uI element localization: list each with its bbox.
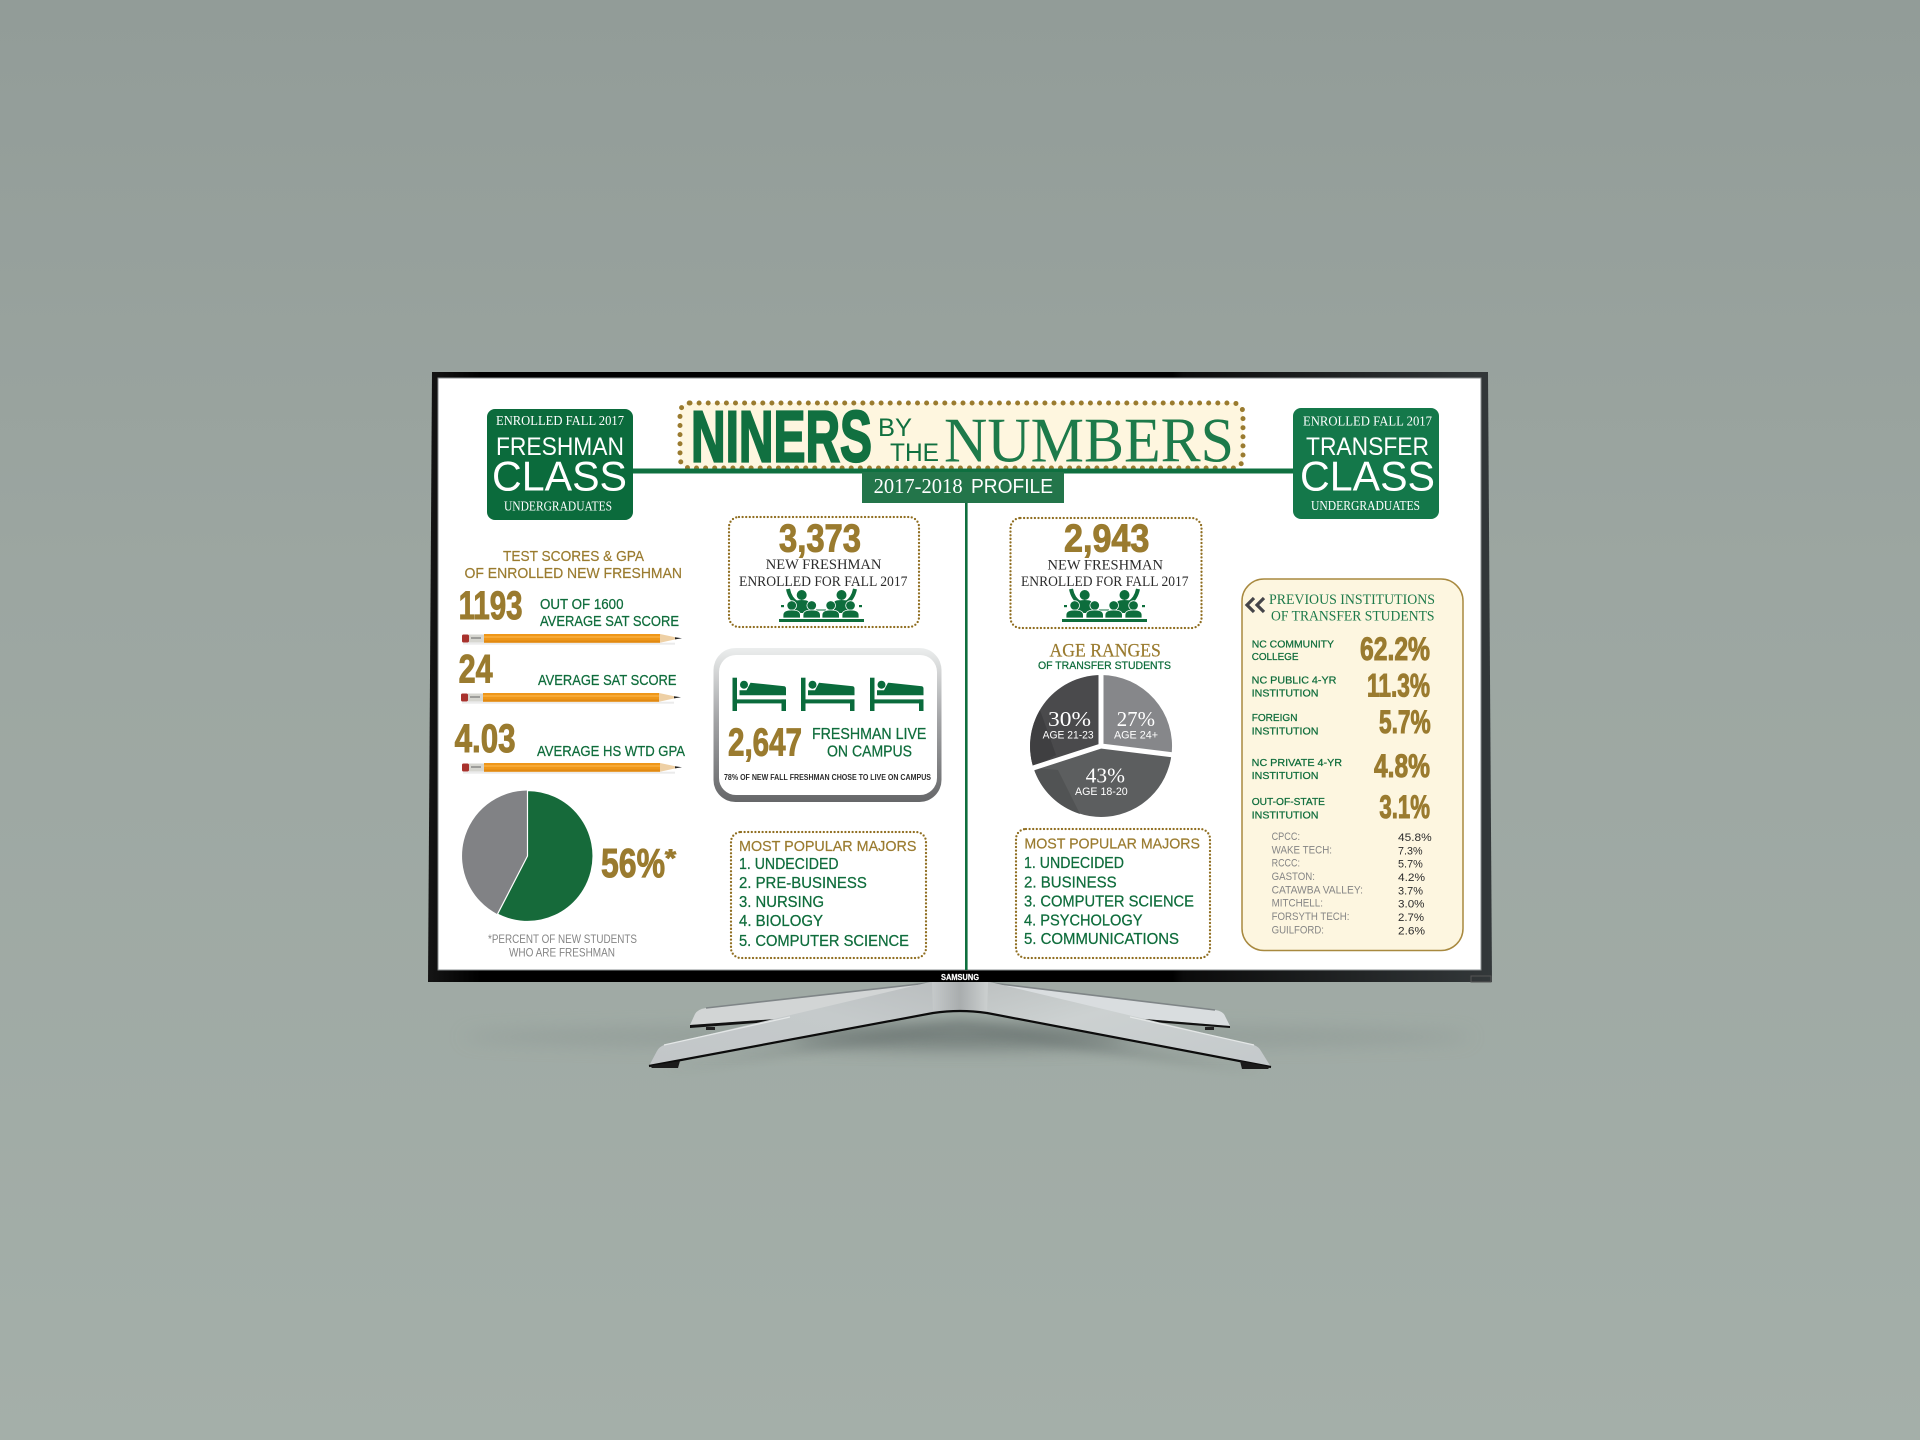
list: community colleges: 3.7% <box>1398 885 1423 897</box>
panel: freshman live on campus: 78% OF NEW FALL FRESHMAN CHOSE TO LIVE ON CAMPUS <box>724 773 932 782</box>
row: nc private: 4.8% <box>1374 748 1430 784</box>
heading: previous institutions <box>1269 592 1435 625</box>
panel: freshman class badge <box>487 409 633 520</box>
floor shadow <box>462 1020 1472 1072</box>
heading: age ranges <box>1038 642 1171 672</box>
list: community colleges: 4.2% <box>1398 872 1425 884</box>
list: community colleges: GASTON: <box>1272 871 1315 883</box>
stat: sat score 1193: OUT OF 1600 <box>540 597 624 613</box>
icon: bed <box>870 678 924 711</box>
footnote: WHO ARE FRESHMAN <box>509 946 615 960</box>
panel: freshman live on campus: FRESHMAN LIVE <box>812 726 926 743</box>
pie chart: age ranges <box>1030 672 1174 817</box>
panel: freshman class badge: UNDERGRADUATES <box>504 500 612 514</box>
title: numbers: NUMBERS <box>944 406 1234 476</box>
slice: 27 percent: AGE 24+ <box>1114 730 1158 742</box>
stat: 56 percent: * <box>665 845 677 872</box>
row: nc public: NC PUBLIC 4-YR <box>1252 675 1337 687</box>
panel: freshman majors <box>731 832 926 958</box>
slice: 43 percent: AGE 18-20 <box>1075 786 1128 798</box>
list: community colleges: WAKE TECH: <box>1272 844 1332 856</box>
icon: crowd <box>1062 589 1147 622</box>
stat: sat score 1193: AVERAGE SAT SCORE <box>540 614 679 630</box>
list: community colleges: 5.7% <box>1398 859 1423 871</box>
panel: transfer majors: 1. UNDECIDED <box>1024 855 1124 872</box>
stat: gpa 4.03: 4.03 <box>455 717 516 761</box>
panel: transfer majors: 3. COMPUTER SCIENCE <box>1024 894 1194 911</box>
slice: 27 percent: 27% <box>1117 707 1155 731</box>
panel: new freshman count: 3,373 <box>779 518 861 560</box>
list: community colleges: 7.3% <box>1398 845 1423 857</box>
panel: transfer majors <box>1016 829 1210 958</box>
title: the: THE <box>890 439 939 467</box>
icon: pencil <box>461 693 681 704</box>
panel: transfer majors: 2. BUSINESS <box>1024 875 1117 892</box>
title: niners: NINERS <box>691 398 872 478</box>
row: foreign: FOREIGN <box>1252 712 1298 724</box>
row: nc community college: COLLEGE <box>1252 651 1298 663</box>
stat: score 24: 24 <box>459 648 493 692</box>
row: nc public <box>1252 668 1430 704</box>
panel: transfer majors: 4. PSYCHOLOGY <box>1024 912 1142 929</box>
icon: pencil <box>462 634 682 645</box>
stat: 56 percent: 56% <box>601 840 665 886</box>
panel: title banner <box>680 398 1243 478</box>
tv stand <box>649 982 1271 1069</box>
panel: transfer class badge: ENROLLED FALL 2017 <box>1303 414 1432 430</box>
row: nc private: NC PRIVATE 4-YR <box>1252 757 1342 769</box>
title: by: BY <box>878 414 912 442</box>
panel: freshman majors: 5. COMPUTER SCIENCE <box>739 933 909 950</box>
icon: pencil <box>462 763 682 774</box>
panel: freshman majors: MOST POPULAR MAJORS <box>739 838 916 855</box>
row: foreign <box>1252 704 1431 740</box>
icon: chevrons <box>1247 598 1264 612</box>
slice: 30 percent: 30% <box>1048 707 1091 731</box>
slice: 30 percent: AGE 21-23 <box>1043 730 1094 742</box>
profile bar <box>862 472 1064 503</box>
panel: freshman class badge: FRESHMAN <box>496 433 624 461</box>
screen <box>438 378 1481 970</box>
list: community colleges: 3.0% <box>1398 899 1425 911</box>
icon: crowd <box>779 589 864 622</box>
panel: new freshman count <box>729 517 919 627</box>
panel: transfer class badge: UNDERGRADUATES <box>1311 499 1420 514</box>
row: nc private <box>1252 748 1430 784</box>
heading: age ranges: OF TRANSFER STUDENTS <box>1038 660 1171 672</box>
row: foreign: INSTITUTION <box>1252 725 1318 737</box>
panel: freshman class badge: ENROLLED FALL 2017 <box>496 414 624 429</box>
list: community colleges <box>1272 831 1432 937</box>
stat: score 24: AVERAGE SAT SCORE <box>538 673 677 689</box>
list: community colleges: 2.7% <box>1398 912 1424 924</box>
panel: transfer majors: 5. COMMUNICATIONS <box>1024 931 1179 948</box>
slice: 43 percent <box>1034 746 1172 817</box>
footnote <box>488 932 637 960</box>
row: out of state: INSTITUTION <box>1252 809 1318 821</box>
panel: freshman live on campus <box>714 648 942 802</box>
tv bezel <box>428 372 1492 982</box>
list: community colleges: GUILFORD: <box>1272 924 1324 936</box>
row: foreign: 5.7% <box>1379 704 1431 740</box>
stat: score 24 <box>459 648 681 704</box>
list: community colleges: 2.6% <box>1398 925 1425 937</box>
panel: freshman live on campus: 2,647 <box>728 722 802 764</box>
stat: gpa 4.03 <box>455 717 685 774</box>
pie chart: percent freshman <box>462 790 593 921</box>
row: nc private: INSTITUTION <box>1252 770 1318 782</box>
row: nc community college: NC COMMUNITY <box>1252 638 1334 650</box>
heading: test scores: TEST SCORES & GPA <box>503 548 644 565</box>
panel: freshman live on campus: ON CAMPUS <box>827 744 912 760</box>
panel: freshman majors: 4. BIOLOGY <box>739 913 823 930</box>
panel: freshman majors: 1. UNDECIDED <box>739 856 839 873</box>
row: nc public: 11.3% <box>1367 668 1430 704</box>
stat: gpa 4.03: AVERAGE HS WTD GPA <box>537 744 685 760</box>
icon: bed <box>801 678 854 711</box>
heading: age ranges: AGE RANGES <box>1050 642 1161 662</box>
list: community colleges: 45.8% <box>1398 832 1432 844</box>
list: community colleges: FORSYTH TECH: <box>1272 911 1350 923</box>
panel: new freshman count: NEW FRESHMAN <box>766 557 882 573</box>
connector line <box>630 468 1295 474</box>
panel: transfer class badge <box>1293 408 1439 519</box>
panel: transfer class badge: CLASS <box>1300 452 1435 500</box>
slice: 27 percent <box>1101 675 1172 755</box>
samsung logo: SAMSUNG <box>941 973 979 982</box>
stand front legs <box>649 982 1271 1069</box>
row: nc community college <box>1252 631 1430 667</box>
row: nc public: INSTITUTION <box>1252 688 1318 700</box>
list: community colleges: MITCHELL: <box>1272 898 1323 910</box>
panel: freshman majors: 2. PRE-BUSINESS <box>739 875 867 892</box>
profile bar: 2017-2018 <box>874 474 963 498</box>
panel: transfer count: ENROLLED FOR FALL 2017 <box>1021 574 1189 590</box>
panel: freshman majors: 3. NURSING <box>739 894 824 911</box>
list: community colleges: CPCC: <box>1272 831 1300 843</box>
stat: sat score 1193 <box>459 584 682 645</box>
list: community colleges: RCCC: <box>1272 858 1300 870</box>
heading: test scores <box>464 548 682 582</box>
panel: transfer class badge: TRANSFER <box>1306 433 1429 461</box>
panel: transfer count <box>1010 518 1202 628</box>
panel: transfer count: NEW FRESHMAN <box>1048 557 1163 573</box>
list: community colleges: CATAWBA VALLEY: <box>1272 884 1363 896</box>
stand back legs <box>690 982 1230 1030</box>
row: out of state: OUT-OF-STATE <box>1252 796 1325 808</box>
slice: 30 percent <box>1030 675 1101 768</box>
center vertical divider <box>965 500 968 970</box>
panel: transfer count: 2,943 <box>1064 518 1149 560</box>
row: nc community college: 62.2% <box>1360 631 1430 667</box>
heading: test scores: OF ENROLLED NEW FRESHMAN <box>464 565 682 582</box>
footnote: *PERCENT OF NEW STUDENTS <box>488 932 637 946</box>
panel: transfer majors: MOST POPULAR MAJORS <box>1024 835 1200 852</box>
panel: previous institutions <box>1242 579 1463 950</box>
row: out of state: 3.1% <box>1379 789 1430 825</box>
heading: previous institutions: PREVIOUS INSTITUTIONS <box>1269 592 1435 608</box>
row: out of state <box>1252 789 1430 825</box>
profile bar: PROFILE <box>971 476 1053 498</box>
heading: previous institutions: OF TRANSFER STUDENTS <box>1271 609 1434 625</box>
icon: bed <box>732 678 786 711</box>
stat: sat score 1193: 1193 <box>459 584 523 628</box>
panel: new freshman count: ENROLLED FOR FALL 2017 <box>739 574 908 590</box>
slice: 43 percent: 43% <box>1086 764 1125 788</box>
panel: freshman class badge: CLASS <box>492 452 627 500</box>
